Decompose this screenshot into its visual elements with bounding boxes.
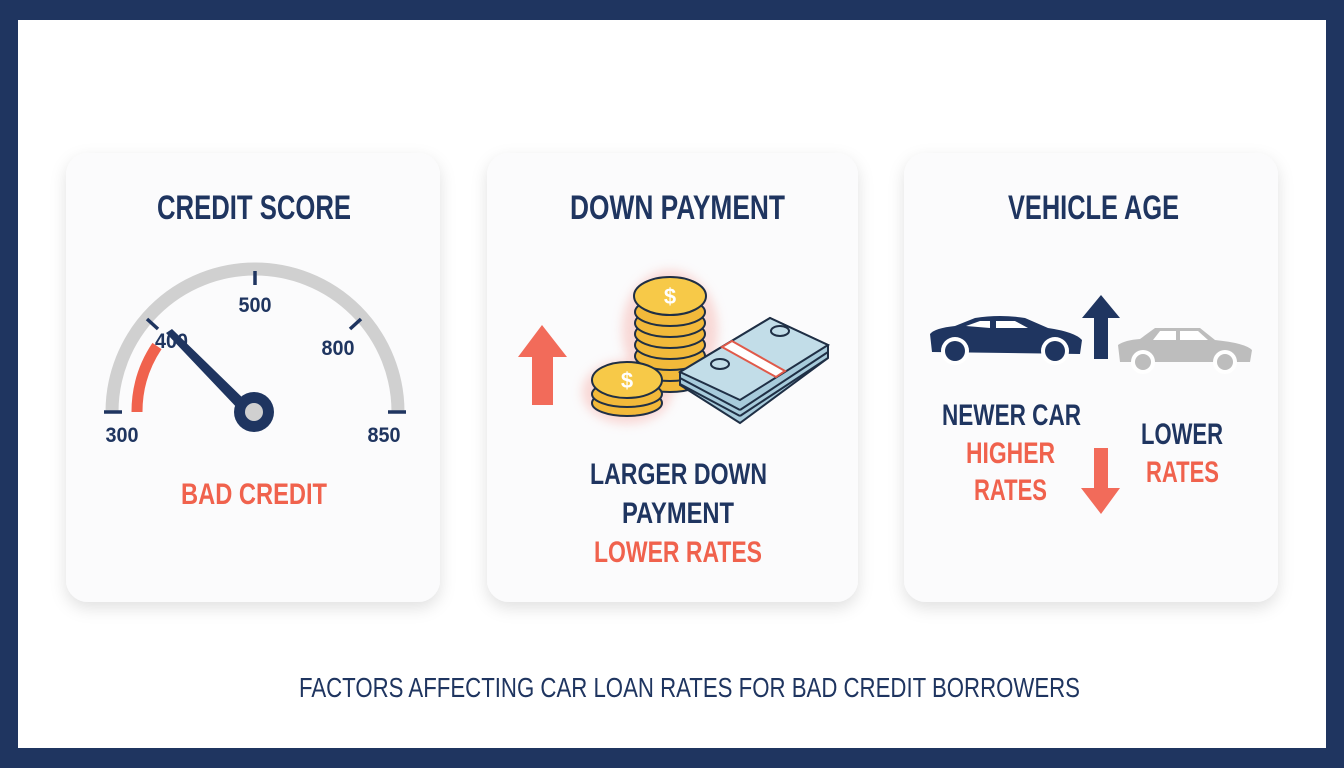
icon: up arrow navy [1082,295,1120,359]
text: newer car higher rates: NEWER CAR [942,399,1081,432]
icon: down arrow [1081,448,1120,514]
text: larger down payment lower rates [590,458,767,569]
text: lower rates [1141,418,1223,489]
gauge: 500 [238,294,272,317]
needle [166,329,249,412]
gauge: 400 [155,330,188,353]
heading: down payment: DOWN PAYMENT [570,189,785,227]
text: newer car higher rates: RATES [974,474,1047,507]
gauge [104,269,406,447]
text: larger down payment lower rates: LARGER DOWN [590,458,767,491]
icon: coins and cash: $ [664,284,676,309]
gauge: 800 [322,337,354,360]
heading: credit score: CREDIT SCORE [157,189,351,227]
icon: coins and cash: $ [621,368,633,393]
text: lower rates: RATES [1146,456,1219,489]
panel: credit score [66,153,440,602]
icon: up arrow [518,325,567,405]
text: larger down payment lower rates: PAYMENT [622,497,734,530]
panel: vehicle age [904,153,1278,602]
panel: down payment [487,153,858,602]
icon: old car [1118,328,1252,374]
text: newer car higher rates [942,399,1081,507]
icon: coins and cash [582,270,828,424]
icon: new car [930,316,1082,365]
gauge: 850 [368,424,400,447]
text: lower rates: LOWER [1141,418,1223,451]
text: newer car higher rates: HIGHER [966,437,1055,470]
footer title: FACTORS AFFECTING CAR LOAN RATES FOR BAD CREDIT BORROWERS [299,672,1080,703]
label: bad credit: BAD CREDIT [181,478,327,511]
text: larger down payment lower rates: LOWER RATES [594,536,762,569]
gauge: 300 [106,424,138,447]
heading: vehicle age: VEHICLE AGE [1008,189,1179,227]
